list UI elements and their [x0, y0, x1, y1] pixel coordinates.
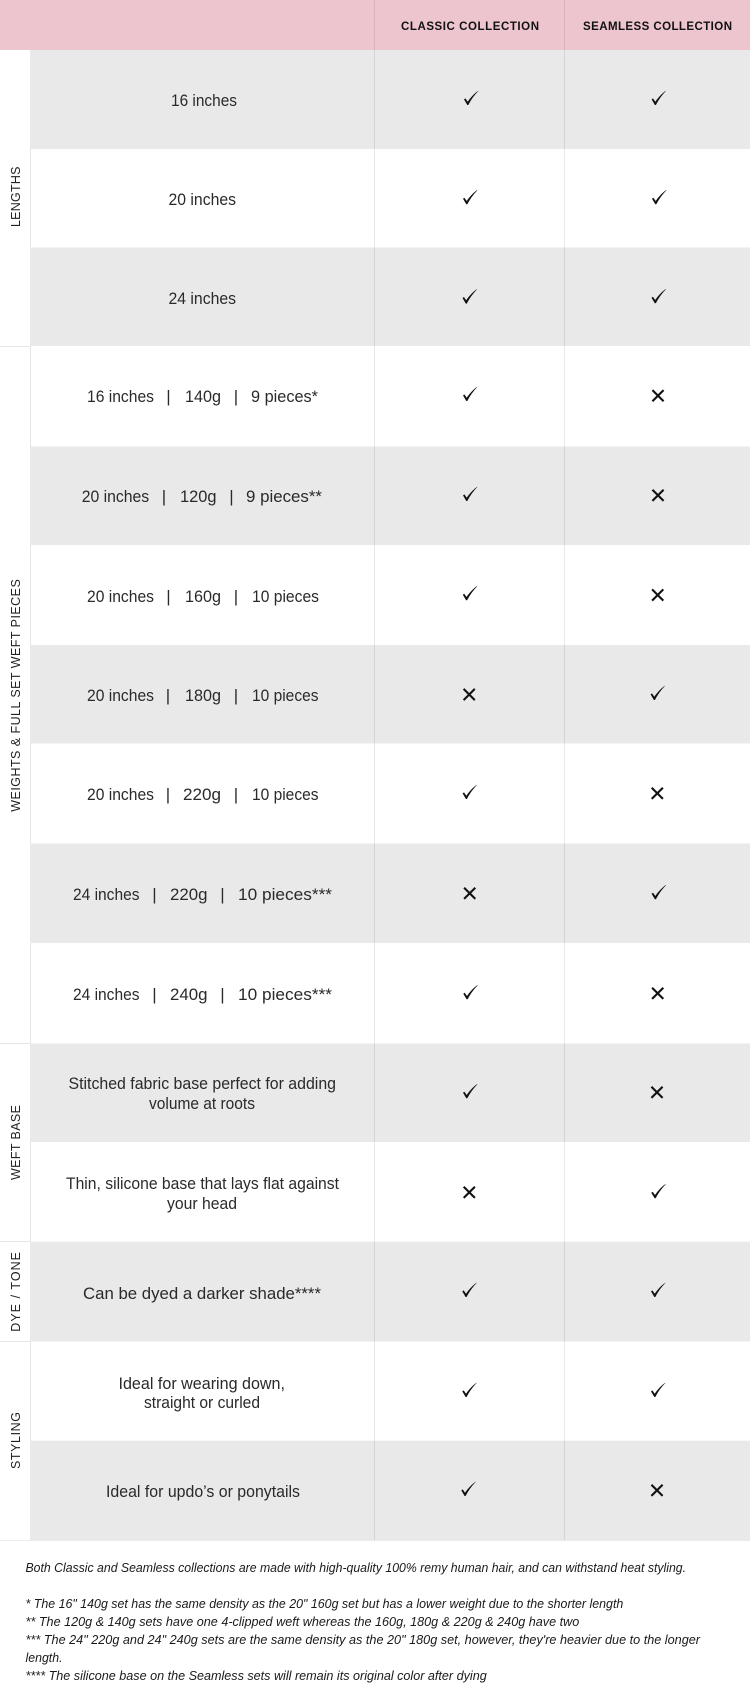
icon: check classic: [463, 487, 477, 501]
row: 20 inches 160g 10 pieces: 160g: [185, 587, 221, 606]
icon: cross classic: [464, 689, 475, 700]
icon: check classic: [462, 1283, 477, 1297]
row: 20 inches 160g 10 pieces: |: [234, 587, 238, 606]
side label: styling: STYLING: [9, 1412, 23, 1469]
icon: cross seamless: [652, 390, 664, 401]
icon: check seamless: [651, 1184, 666, 1198]
row: 16 inches 140g 9 pieces: [87, 387, 664, 406]
row: 20 inches 180g 10 pieces: |: [166, 686, 170, 705]
row: 24 inches 240g 10 pieces: |: [220, 985, 225, 1004]
row: 20 inches 160g 10 pieces: 20 inches: [87, 587, 154, 606]
footnotes: length.: [26, 1650, 62, 1665]
icon: check seamless: [652, 91, 666, 105]
row: 20 inches 120g 9 pieces: 20 inches: [82, 487, 149, 506]
icon: check seamless: [651, 1283, 665, 1297]
icon: cross seamless: [652, 988, 663, 999]
row: 20 inches 120g 9 pieces: [30, 446, 750, 545]
row: thin silicone base: Thin, silicone base that lays flat against: [66, 1174, 339, 1193]
heading: classic collection: CLASSIC COLLECTION: [401, 21, 539, 33]
row: 24 inches: [30, 248, 750, 346]
footnotes: Both Classic and Seamless collections are made with high-quality 100% remy human hair, and can withstand heat styling.: [26, 1560, 686, 1575]
row: 16 inches 140g 9 pieces: |: [234, 387, 238, 406]
icon: check seamless: [652, 289, 666, 303]
icon: check seamless: [651, 1383, 665, 1397]
icon: check classic: [462, 289, 477, 304]
row: 24 inches 240g 10 pieces: 24 inches: [73, 985, 140, 1004]
row: 24 inches 220g 10 pieces: 24 inches: [73, 885, 140, 904]
row: 20 inches 180g 10 pieces: 180g: [185, 686, 221, 705]
row: 24 inches 240g 10 pieces: 240g: [170, 985, 208, 1004]
icon: cross seamless: [651, 1485, 663, 1496]
row: stitched fabric base: [30, 1044, 750, 1142]
row: 20 inches 160g 10 pieces: 10 pieces: [252, 587, 319, 606]
row: stitched fabric base: volume at roots: [149, 1094, 255, 1113]
row: 24 inches 220g 10 pieces: 220g: [170, 885, 208, 904]
side label: weights and full set weft pieces: WEIGHTS & FULL SET WEFT PIECES: [9, 579, 23, 812]
icon: cross seamless: [652, 788, 663, 799]
row: 20 inches 160g 10 pieces: |: [166, 587, 171, 606]
icon: check seamless: [652, 885, 666, 899]
row: 20 inches 120g 9 pieces: 9 pieces**: [246, 487, 322, 506]
row: ideal for wearing down: straight or curled: [144, 1393, 260, 1412]
row: ideal for updos: Ideal for updo’s or ponytails: [106, 1482, 300, 1501]
row: 24 inches 220g 10 pieces: 10 pieces***: [238, 885, 332, 904]
row: ideal for wearing down: [118, 1374, 665, 1412]
icon: check classic: [464, 91, 478, 105]
row: 20 inches 180g 10 pieces: 20 inches: [87, 686, 154, 705]
row: 24 inches 240g 10 pieces: |: [152, 985, 157, 1004]
footnotes: ** The 120g & 140g sets have one 4-clipped weft whereas the 160g, 180g & 220g & 240g have two: [26, 1614, 579, 1629]
row: ideal for wearing down: Ideal for wearing down,: [118, 1374, 285, 1393]
icon: check classic: [463, 1084, 477, 1098]
row: 20 inches 180g 10 pieces: |: [234, 686, 238, 705]
footnotes: [26, 1560, 701, 1683]
icon: check classic: [461, 1482, 476, 1496]
icon: check classic: [463, 190, 477, 204]
footnotes: *** The 24" 220g and 24" 240g sets are the same density as the 20" 180g set, however, they're heavier due to the longer: [26, 1632, 701, 1647]
footnotes: **** The silicone base on the Seamless sets will remain its original color after dying: [26, 1668, 487, 1683]
row: 20 inches 160g 10 pieces: [87, 586, 663, 606]
side label: lengths: LENGTHS: [9, 166, 23, 227]
header band: [0, 0, 750, 50]
side label: dye tone: DYE / TONE: [9, 1252, 23, 1332]
row: 16 inches 140g 9 pieces: 16 inches: [87, 387, 154, 406]
icon: cross classic: [464, 888, 475, 899]
row: stitched fabric base: Stitched fabric base perfect for adding: [68, 1074, 336, 1093]
row: 20 inches: 20 inches: [168, 190, 236, 209]
row: 20 inches 220g 10 pieces: [87, 785, 663, 804]
row: can be dyed: [30, 1242, 750, 1342]
row: 24 inches 240g 10 pieces: [73, 985, 663, 1004]
row: thin silicone base: [66, 1174, 666, 1213]
row: 24 inches: 24 inches: [168, 289, 236, 308]
icon: check classic: [463, 586, 477, 600]
icon: check classic: [463, 387, 477, 401]
row: 16 inches 140g 9 pieces: |: [166, 387, 171, 406]
icon: check seamless: [652, 190, 666, 204]
row: 20 inches 220g 10 pieces: 10 pieces: [252, 785, 318, 804]
row: 16 inches: 16 inches: [171, 91, 237, 110]
row: 20 inches 120g 9 pieces: |: [229, 487, 234, 506]
row: 24 inches 240g 10 pieces: 10 pieces***: [238, 985, 332, 1004]
row: 20 inches 220g 10 pieces: |: [166, 785, 170, 804]
row: 20 inches 120g 9 pieces: |: [162, 487, 166, 506]
row: 20 inches 180g 10 pieces: [30, 645, 750, 744]
icon: cross seamless: [652, 589, 663, 601]
row: 20 inches 180g 10 pieces: 10 pieces: [252, 686, 318, 705]
row: 24 inches 220g 10 pieces: |: [220, 885, 225, 904]
icon: check classic: [463, 985, 478, 999]
row: ideal for updos: [30, 1441, 750, 1540]
row: thin silicone base: your head: [167, 1194, 237, 1213]
row: 16 inches 140g 9 pieces: 9 pieces*: [251, 387, 318, 406]
row: 20 inches 220g 10 pieces: 20 inches: [87, 785, 154, 804]
side label: weft base: WEFT BASE: [9, 1105, 23, 1180]
row: 16 inches: [30, 50, 750, 149]
row: 20 inches 220g 10 pieces: |: [234, 785, 238, 804]
row: 24 inches 220g 10 pieces: [30, 844, 750, 943]
row: 16 inches 140g 9 pieces: 140g: [185, 387, 221, 406]
icon: check classic: [463, 785, 477, 799]
icon: cross seamless: [651, 1087, 663, 1098]
icon: cross seamless: [652, 490, 664, 501]
row: can be dyed: Can be dyed a darker shade****: [83, 1284, 321, 1303]
icon: check classic: [462, 1383, 477, 1397]
icon: cross classic: [464, 1187, 475, 1198]
icon: check seamless: [651, 686, 665, 700]
footnotes: * The 16" 140g set has the same density as the 20" 160g set but has a lower weight due to the shorter length: [26, 1596, 623, 1611]
row: 24 inches 220g 10 pieces: |: [152, 885, 157, 904]
row: 20 inches: [168, 190, 666, 209]
row: 20 inches 220g 10 pieces: 220g: [183, 785, 221, 804]
row: 20 inches 120g 9 pieces: 120g: [180, 487, 216, 506]
heading: seamless collection: SEAMLESS COLLECTION: [583, 21, 732, 33]
